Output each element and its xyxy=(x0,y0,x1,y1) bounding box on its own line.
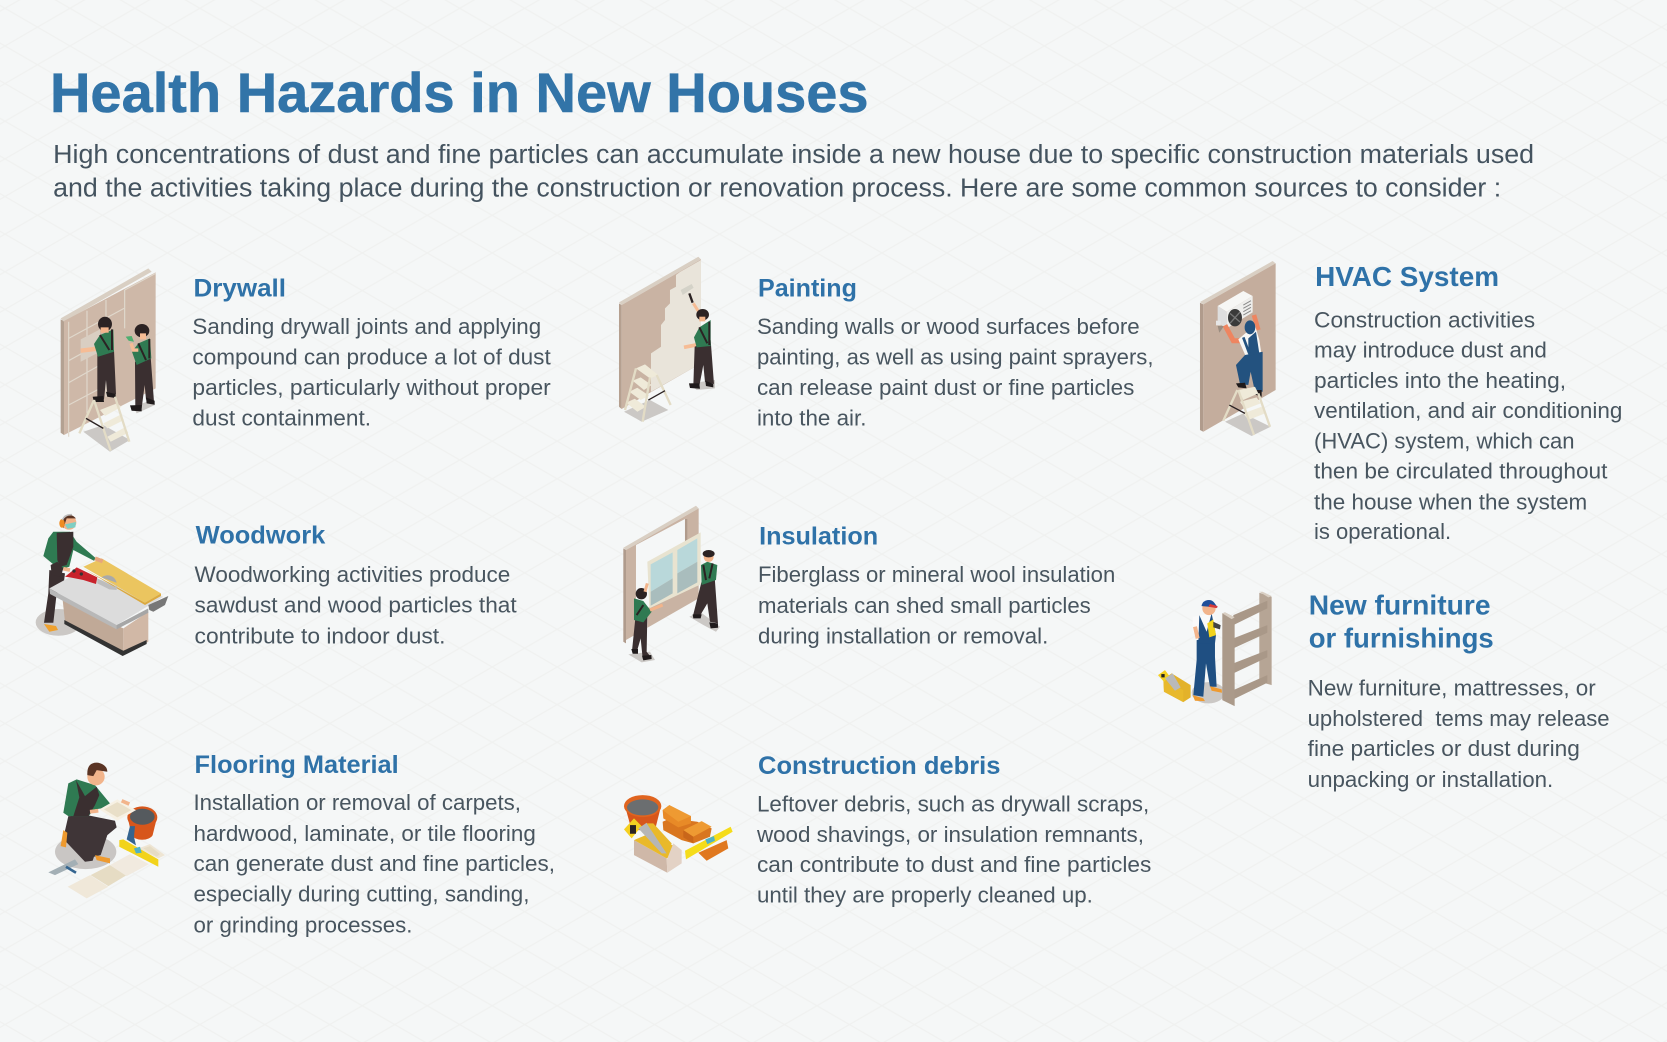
icon: bucket, toolbox and bricks xyxy=(624,795,733,873)
text: new furniture: unpacking or installation. xyxy=(1308,767,1553,792)
panel: woodwork xyxy=(36,515,517,656)
panel: flooring material xyxy=(48,751,555,937)
heading: painting: Painting xyxy=(758,275,857,303)
text: flooring material: especially during cutting, sanding, xyxy=(193,882,529,907)
text: new furniture: upholstered tems may release xyxy=(1308,706,1610,731)
panel: painting xyxy=(619,257,1154,430)
text: flooring material: hardwood, laminate, or tile flooring xyxy=(193,821,536,846)
icon: worker assembling a shelf xyxy=(1158,592,1272,706)
panel: new furniture or furnishings xyxy=(1158,590,1610,792)
text: drywall xyxy=(192,314,551,430)
text: painting: painting, as well as using paint sprayers, xyxy=(757,345,1154,370)
heading: new furniture: New furniture xyxy=(1309,590,1491,621)
icon: carpenter at table saw xyxy=(36,515,168,656)
text: drywall: particles, particularly without proper xyxy=(192,375,551,400)
text: HVAC system: ventilation, and air conditioning xyxy=(1314,398,1622,423)
panel: insulation xyxy=(623,506,1115,662)
text: insulation: Fiberglass or mineral wool insulation xyxy=(758,562,1115,587)
icon: worker installing an air conditioner xyxy=(1200,261,1276,436)
text: HVAC system: Construction activities xyxy=(1314,307,1535,332)
heading: construction debris: Construction debris xyxy=(758,752,1000,780)
text: construction debris xyxy=(756,791,1151,908)
text: HVAC system: particles into the heating, xyxy=(1314,368,1566,393)
text: HVAC system: (HVAC) system, which can xyxy=(1314,429,1575,454)
text: construction debris: Leftover debris, such as drywall scraps, xyxy=(757,791,1149,816)
text: woodwork: Woodworking activities produce xyxy=(195,562,510,587)
text: insulation: materials can shed small particles xyxy=(758,593,1091,618)
text: construction debris: can contribute to dust and fine particles xyxy=(757,852,1151,877)
text: new furniture: New furniture, mattresses, or xyxy=(1308,675,1596,700)
text: HVAC system: the house when the system xyxy=(1314,489,1587,514)
heading: woodwork: Woodwork xyxy=(196,521,325,549)
intro paragraph: and the activities taking place during the construction or renovation process. Here are some common sources to consider : xyxy=(53,173,1501,203)
text: painting: into the air. xyxy=(757,405,866,430)
text: painting: Sanding walls or wood surfaces before xyxy=(757,314,1140,339)
text: woodwork xyxy=(195,562,517,648)
intro paragraph xyxy=(53,139,1534,203)
text: flooring material: Installation or removal of carpets, xyxy=(193,790,521,815)
text: flooring material: can generate dust and fine particles, xyxy=(193,851,555,876)
text: flooring material: or grinding processes. xyxy=(193,912,412,937)
panel: HVAC system xyxy=(1200,261,1622,544)
icon: two workers fixing drywall xyxy=(61,268,156,452)
panel: drywall xyxy=(61,268,551,452)
heading: new furniture: or furnishings xyxy=(1309,623,1494,654)
icon: worker painting a wall xyxy=(619,257,715,422)
icon: worker laying floor tiles xyxy=(48,763,165,898)
text: painting xyxy=(757,314,1154,430)
text: construction debris: until they are properly cleaned up. xyxy=(757,883,1093,908)
text: insulation: during installation or removal. xyxy=(758,623,1048,648)
heading: HVAC system: HVAC System xyxy=(1315,261,1499,292)
text: drywall: dust containment. xyxy=(192,405,371,430)
heading: insulation: Insulation xyxy=(759,522,878,550)
heading: new furniture xyxy=(1309,590,1494,654)
intro paragraph: High concentrations of dust and fine particles can accumulate inside a new house due to specific construction materials used xyxy=(53,139,1534,169)
panel: construction debris xyxy=(624,752,1151,908)
text: HVAC system: may introduce dust and xyxy=(1314,337,1547,362)
heading: flooring material: Flooring Material xyxy=(195,751,399,779)
text: HVAC system xyxy=(1314,307,1622,544)
text: new furniture: fine particles or dust during xyxy=(1308,736,1580,761)
text: insulation xyxy=(758,562,1115,648)
title: Health Hazards in New Houses xyxy=(50,61,869,124)
text: drywall: compound can produce a lot of dust xyxy=(192,345,551,370)
text: new furniture xyxy=(1308,675,1610,792)
text: construction debris: wood shavings, or insulation remnants, xyxy=(756,822,1144,847)
text: drywall: Sanding drywall joints and applying xyxy=(192,314,541,339)
text: painting: can release paint dust or fine particles xyxy=(757,375,1134,400)
text: flooring material xyxy=(193,790,555,937)
icon: workers fitting a window xyxy=(623,506,720,662)
text: woodwork: sawdust and wood particles that xyxy=(195,592,517,617)
text: HVAC system: then be circulated throughout xyxy=(1314,458,1607,483)
heading: drywall: Drywall xyxy=(193,275,286,303)
text: HVAC system: is operational. xyxy=(1314,519,1451,544)
text: woodwork: contribute to indoor dust. xyxy=(195,623,445,648)
